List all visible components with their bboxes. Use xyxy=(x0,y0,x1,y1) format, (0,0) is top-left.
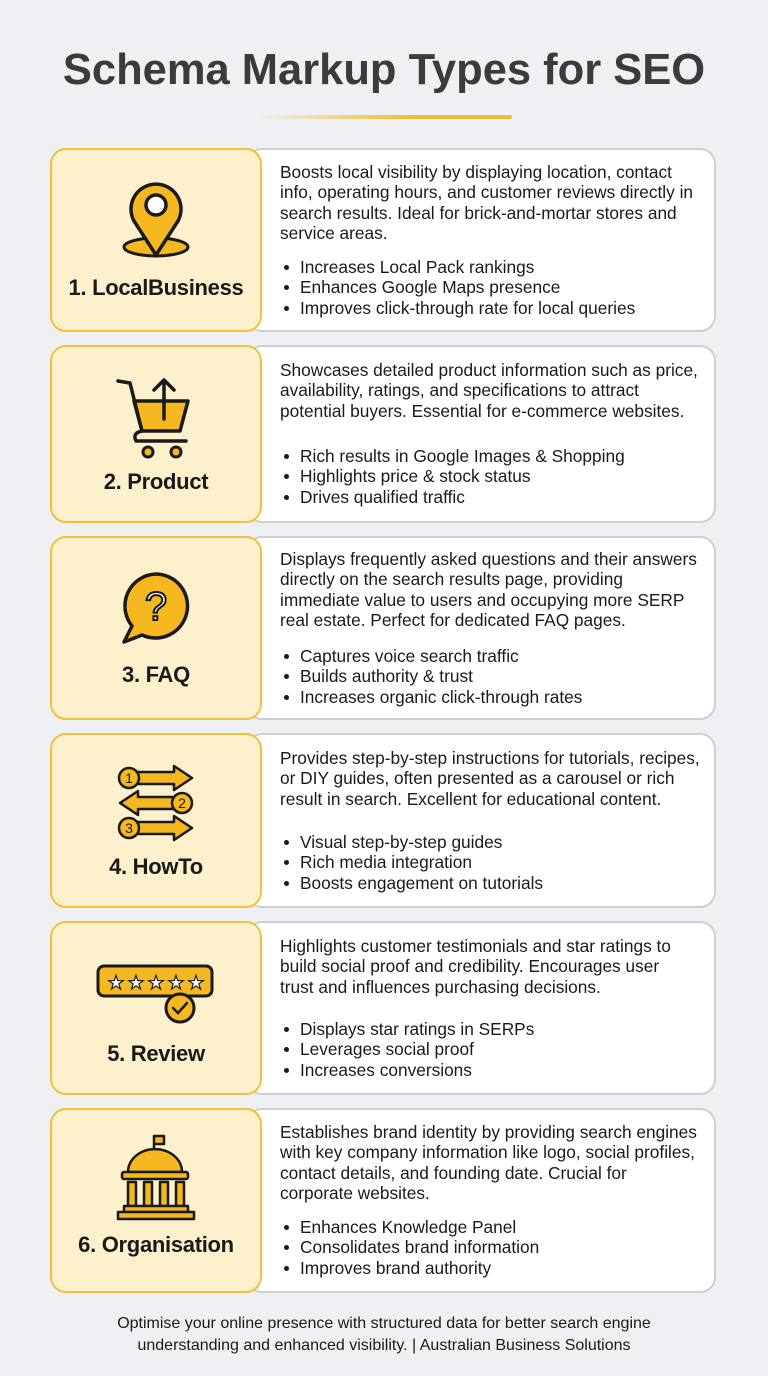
text: FAQ description: Displays frequently asked questions and their answers directly on the search results page, providing immediate value to users and occupying more SERP real estate. Perfect for dedicated FAQ pages. xyxy=(280,549,697,630)
card: Organisation xyxy=(50,1108,716,1293)
label: Organisation: 6. Organisation xyxy=(78,1232,234,1257)
card: LocalBusiness xyxy=(50,148,716,332)
title: Schema Markup Types for SEO xyxy=(63,46,705,94)
bullets: Product: Drives qualified traffic xyxy=(300,487,465,507)
bullets: Organisation: Enhances Knowledge Panel xyxy=(300,1217,516,1237)
text: Organisation description: contact details, and founding date. Crucial for xyxy=(280,1163,627,1183)
bullets: Organisation xyxy=(284,1217,539,1278)
bullets: FAQ: Builds authority & trust xyxy=(300,666,473,686)
text: HowTo description: Provides step-by-step instructions for tutorials, recipes, or DIY guides, often presented as a carousel or rich result in search. Excellent for educational content. xyxy=(280,748,700,809)
icon: star rating: ★ xyxy=(187,972,205,994)
footer xyxy=(117,1315,651,1354)
footer: Optimise your online presence with structured data for better search engine xyxy=(117,1315,651,1332)
text: Organisation description: with key company information like logo, social profiles, xyxy=(280,1142,695,1162)
icon: step arrows: 3 xyxy=(125,820,133,836)
icon: location pin xyxy=(122,182,190,258)
text: Organisation description: corporate websites. xyxy=(280,1183,430,1203)
bullets: Review: Leverages social proof xyxy=(300,1039,474,1059)
text: Review description xyxy=(280,936,671,997)
bullets: HowTo: Rich media integration xyxy=(300,852,472,872)
text: Review description: trust and influences purchasing decisions. xyxy=(280,977,601,997)
text: Organisation description: Establishes brand identity by providing search engines xyxy=(280,1122,697,1142)
label: LocalBusiness: 1. LocalBusiness xyxy=(69,275,243,300)
label: Review: 5. Review xyxy=(107,1041,205,1066)
bullets: HowTo xyxy=(284,832,543,893)
bullets: Review: Displays star ratings in SERPs xyxy=(300,1019,534,1039)
bullets: Product xyxy=(284,446,625,507)
bullets: FAQ: Increases organic click-through rates xyxy=(300,687,582,707)
icon: star rating xyxy=(96,964,214,1024)
icon: shopping cart xyxy=(116,378,190,458)
bullets: Review xyxy=(284,1019,534,1080)
footer: understanding and enhanced visibility. | Australian Business Solutions xyxy=(137,1337,631,1354)
bullets: LocalBusiness: Enhances Google Maps presence xyxy=(300,277,560,297)
bullets: LocalBusiness: Increases Local Pack rankings xyxy=(300,257,534,277)
text: Product description: Showcases detailed product information such as price, availability, ratings, and specifications to attract potential buyers. Essential for e-commerce websites. xyxy=(280,360,698,421)
text: Review description: Highlights customer testimonials and star ratings to xyxy=(280,936,671,956)
card: Product xyxy=(50,345,716,523)
text: Organisation description xyxy=(280,1122,697,1203)
bullets: LocalBusiness: Improves click-through rate for local queries xyxy=(300,298,635,318)
label: Product: 2. Product xyxy=(104,469,208,494)
text: Review description: build social proof and credibility. Encourages user xyxy=(280,956,659,976)
card: HowTo xyxy=(50,733,716,908)
bullets: Product: Rich results in Google Images & Shopping xyxy=(300,446,625,466)
icon: star rating: ★ xyxy=(147,972,165,994)
icon: institution building xyxy=(116,1134,196,1220)
bullets: FAQ: Captures voice search traffic xyxy=(300,646,519,666)
card: FAQ xyxy=(50,536,716,720)
bullets: Review: Increases conversions xyxy=(300,1060,472,1080)
icon: star rating: ★ xyxy=(167,972,185,994)
label: HowTo: 4. HowTo xyxy=(109,854,203,879)
bullets: HowTo: Visual step-by-step guides xyxy=(300,832,502,852)
bullets: HowTo: Boosts engagement on tutorials xyxy=(300,873,543,893)
icon: star rating: ★ xyxy=(127,972,145,994)
card: Review xyxy=(50,921,716,1095)
title underline xyxy=(258,115,512,119)
bullets: Product: Highlights price & stock status xyxy=(300,466,531,486)
icon: step arrows xyxy=(118,764,194,842)
bullets: Organisation: Consolidates brand information xyxy=(300,1237,539,1257)
label: FAQ: 3. FAQ xyxy=(122,662,190,687)
icon: question bubble xyxy=(122,572,190,644)
icon: step arrows: 1 xyxy=(125,770,133,786)
icon: star rating: ★ xyxy=(107,972,125,994)
icon: step arrows: 2 xyxy=(178,795,186,811)
bullets: Organisation: Improves brand authority xyxy=(300,1258,491,1278)
text: LocalBusiness description: Boosts local visibility by displaying location, contact info, operating hours, and customer reviews directly in search results. Ideal for brick-and-mortar stores and service areas. xyxy=(280,162,693,243)
bullets: LocalBusiness xyxy=(284,257,635,318)
bullets: FAQ xyxy=(284,646,582,707)
icon: question bubble: ? xyxy=(145,585,167,629)
